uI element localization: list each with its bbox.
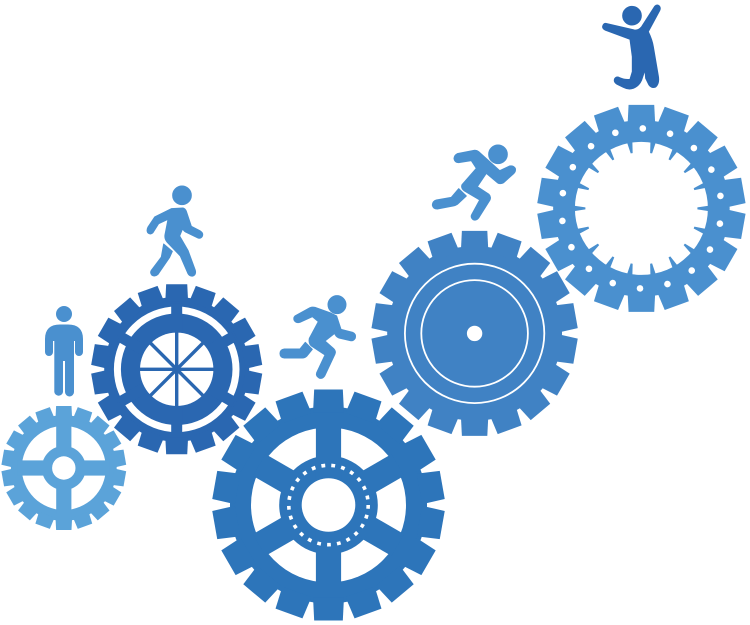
figure: standing person — [45, 306, 83, 396]
figure: walking person — [147, 186, 203, 276]
figure: jumping person — [603, 5, 660, 89]
figure: running person on gear 3 — [280, 296, 356, 378]
gear 1: light blue with cross spokes — [1, 406, 126, 530]
gear 4: blue with two concentric rings — [371, 231, 578, 436]
gear 2: dark blue with segmented ring and thin spokes — [91, 284, 262, 454]
figure: running person on gear 4 — [432, 145, 515, 220]
gear 5: open ring gear with dots and inner spikes — [537, 105, 746, 312]
gear 3: large mid blue with six spokes and dotted ring — [212, 390, 445, 620]
